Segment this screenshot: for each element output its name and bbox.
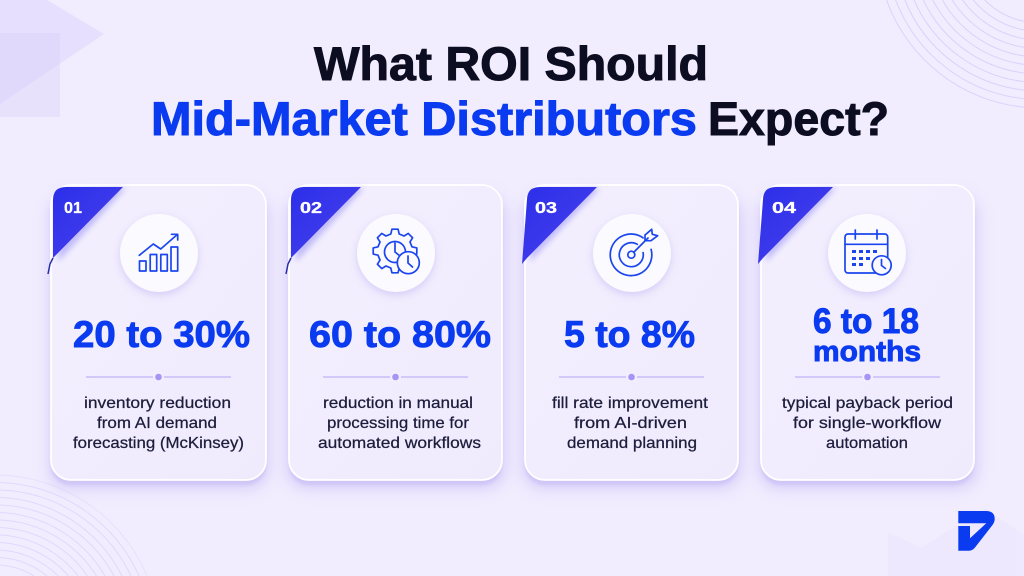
title: Expect? bbox=[708, 92, 889, 145]
icon: gear and clock bbox=[357, 214, 435, 295]
description bbox=[318, 395, 481, 452]
ribbon 03: 03 bbox=[535, 200, 557, 217]
statistic: 60 to 80% bbox=[309, 314, 491, 355]
description: processing time for bbox=[327, 415, 470, 432]
statistic: 6 to 18 bbox=[813, 302, 919, 341]
panel: card 1 inventory reduction bbox=[48, 185, 270, 490]
ribbon 04: 04 bbox=[772, 200, 796, 217]
divider bbox=[86, 372, 231, 382]
title: Mid-Market Distributors bbox=[151, 92, 697, 145]
description: typical payback period bbox=[782, 395, 953, 412]
title: What ROI Should bbox=[314, 37, 708, 90]
ribbon 01: 01 bbox=[64, 200, 82, 217]
description: from AI demand bbox=[97, 415, 217, 432]
description bbox=[782, 395, 953, 452]
description: fill rate improvement bbox=[552, 395, 709, 412]
decorative triangle top left bbox=[0, 0, 104, 117]
decorative hexagon bottom right bbox=[888, 508, 1024, 576]
description: forecasting (McKinsey) bbox=[73, 435, 244, 452]
description: inventory reduction bbox=[84, 395, 231, 412]
description: automation bbox=[826, 435, 908, 452]
title bbox=[151, 37, 889, 145]
description: for single-workflow bbox=[793, 415, 941, 432]
statistic: 5 to 8% bbox=[564, 314, 695, 355]
statistic: months bbox=[813, 336, 921, 368]
ribbon 02: 02 bbox=[300, 200, 322, 217]
description bbox=[73, 395, 244, 452]
decorative arcs top right bbox=[887, 0, 1024, 107]
icon: growth chart bbox=[120, 214, 198, 295]
icon: target with arrow bbox=[593, 214, 671, 295]
ribbon 04 bbox=[758, 187, 836, 264]
panel: card 2 manual processing bbox=[285, 185, 507, 490]
divider bbox=[559, 372, 704, 382]
icon: calendar and clock bbox=[828, 214, 906, 295]
divider bbox=[323, 372, 468, 382]
statistic: 20 to 30% bbox=[73, 314, 250, 355]
description: demand planning bbox=[567, 435, 697, 452]
statistic bbox=[813, 302, 921, 368]
panel: card 4 payback period bbox=[757, 185, 979, 490]
icon: brand logo bbox=[958, 511, 995, 551]
panel: card 3 fill rate bbox=[521, 185, 743, 490]
decorative arcs bottom left bbox=[0, 475, 147, 576]
description: from AI-driven bbox=[574, 415, 687, 432]
ribbon 03 bbox=[522, 187, 600, 264]
description: reduction in manual bbox=[323, 395, 473, 412]
ribbon 01 bbox=[48, 187, 126, 274]
divider bbox=[795, 372, 940, 382]
ribbon 02 bbox=[286, 187, 364, 274]
description bbox=[552, 395, 709, 452]
description: automated workflows bbox=[318, 435, 481, 452]
